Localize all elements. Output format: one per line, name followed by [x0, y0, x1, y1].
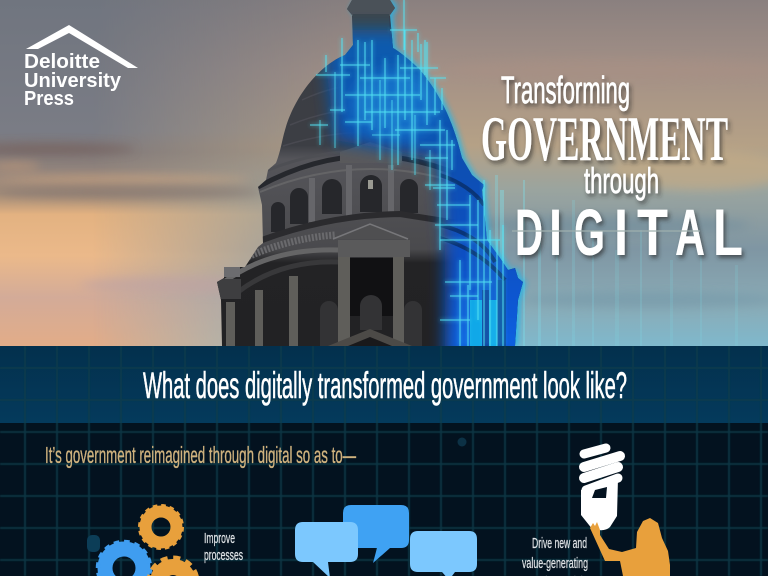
title line: DIGITAL: T — [637, 195, 668, 269]
blue gear — [98, 542, 150, 576]
title line: through: through — [584, 160, 659, 201]
title line: DIGITAL: I — [549, 195, 562, 269]
title line: DIGITAL: A — [675, 195, 705, 269]
title line: DIGITAL: G — [574, 195, 605, 269]
icon: light bulb — [581, 448, 620, 530]
logo: Deloitte University Press — [24, 25, 138, 110]
orange gear — [140, 506, 182, 548]
label: improve processes — [204, 530, 243, 564]
title line: DIGITAL: L — [713, 195, 743, 269]
label: drive new service models — [522, 535, 588, 576]
columns — [226, 257, 404, 346]
lower windows — [350, 258, 393, 316]
icon: gears — [87, 506, 197, 576]
icon: roof — [26, 25, 138, 68]
upper cornice — [258, 150, 484, 192]
mid cornice and balustrade — [262, 211, 448, 243]
label: drive new service models: value-generating — [522, 555, 588, 572]
second orange gear — [149, 558, 197, 576]
circuit lines over dome — [310, 0, 503, 346]
title line: DIGITAL: I — [614, 195, 628, 269]
icon: speech bubbles — [295, 505, 477, 576]
title line: DIGITAL: D — [515, 195, 543, 269]
sky background — [0, 0, 768, 346]
dark body — [0, 423, 768, 576]
title line: DIGITAL — [515, 195, 743, 269]
label: improve processes: processes — [204, 547, 243, 564]
drum windows — [271, 175, 418, 232]
panel: hero photo — [0, 0, 768, 360]
icon: woman reaching up — [590, 518, 670, 576]
label: improve processes: Improve — [204, 530, 235, 547]
logo wordmark — [24, 50, 122, 110]
digital blue wash — [322, 30, 540, 360]
intro line: It’s government reimagined through digital so as to— — [45, 442, 356, 468]
logo wordmark: University — [24, 69, 122, 92]
title line: Transforming: Transforming — [501, 70, 630, 112]
logo wordmark: Press — [24, 87, 74, 110]
digital light columns — [495, 175, 738, 346]
panel: what does it look like — [0, 346, 768, 576]
header band — [0, 346, 768, 423]
label: drive new service models: Drive new and — [532, 535, 587, 552]
dome ribs — [283, 90, 452, 146]
title — [481, 70, 743, 269]
icon: capitol dome — [210, 0, 540, 360]
logo wordmark: Deloitte — [24, 50, 100, 73]
